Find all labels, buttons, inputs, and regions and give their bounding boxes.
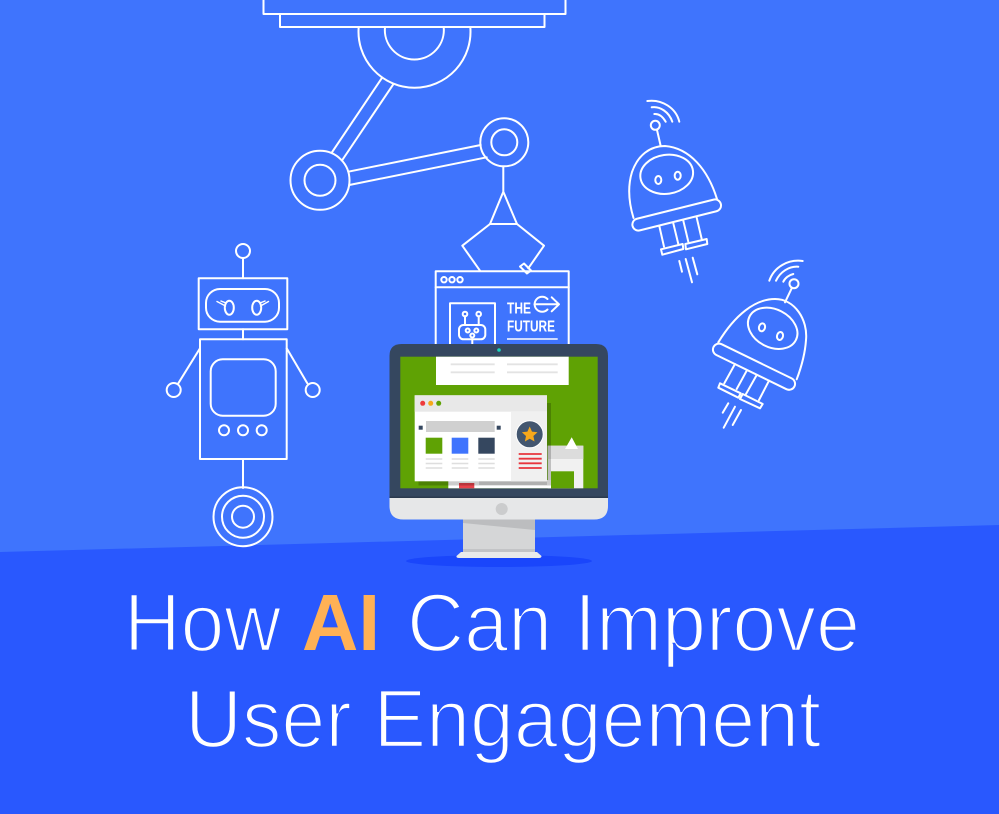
title word: can improve: Can Improve — [407, 576, 860, 669]
monitor bezel — [390, 344, 608, 498]
title word: how: How — [124, 576, 282, 669]
robot arm — [264, 0, 566, 274]
monitor chin — [390, 498, 608, 520]
camera — [497, 348, 501, 352]
text: the: THE — [507, 300, 531, 318]
home button — [496, 503, 508, 515]
icon: arrow in circle — [534, 297, 559, 312]
icon: small robot — [459, 312, 485, 346]
text: future: FUTURE — [507, 318, 555, 336]
back window — [448, 437, 583, 488]
window shadow — [418, 403, 551, 486]
browser window: the future — [436, 271, 569, 351]
flying robot bottom — [711, 261, 806, 428]
title word: ai: AI — [302, 578, 380, 667]
monitor — [390, 344, 608, 567]
title line two: User Engagement — [185, 672, 821, 765]
monitor stand — [456, 519, 542, 558]
flying robot top — [629, 101, 722, 282]
paper on screen — [436, 357, 569, 385]
left robot — [167, 244, 320, 546]
title — [124, 576, 860, 765]
screen — [400, 357, 598, 488]
badge — [516, 421, 543, 448]
monitor shadow — [406, 555, 592, 567]
browser window on screen — [415, 395, 547, 481]
